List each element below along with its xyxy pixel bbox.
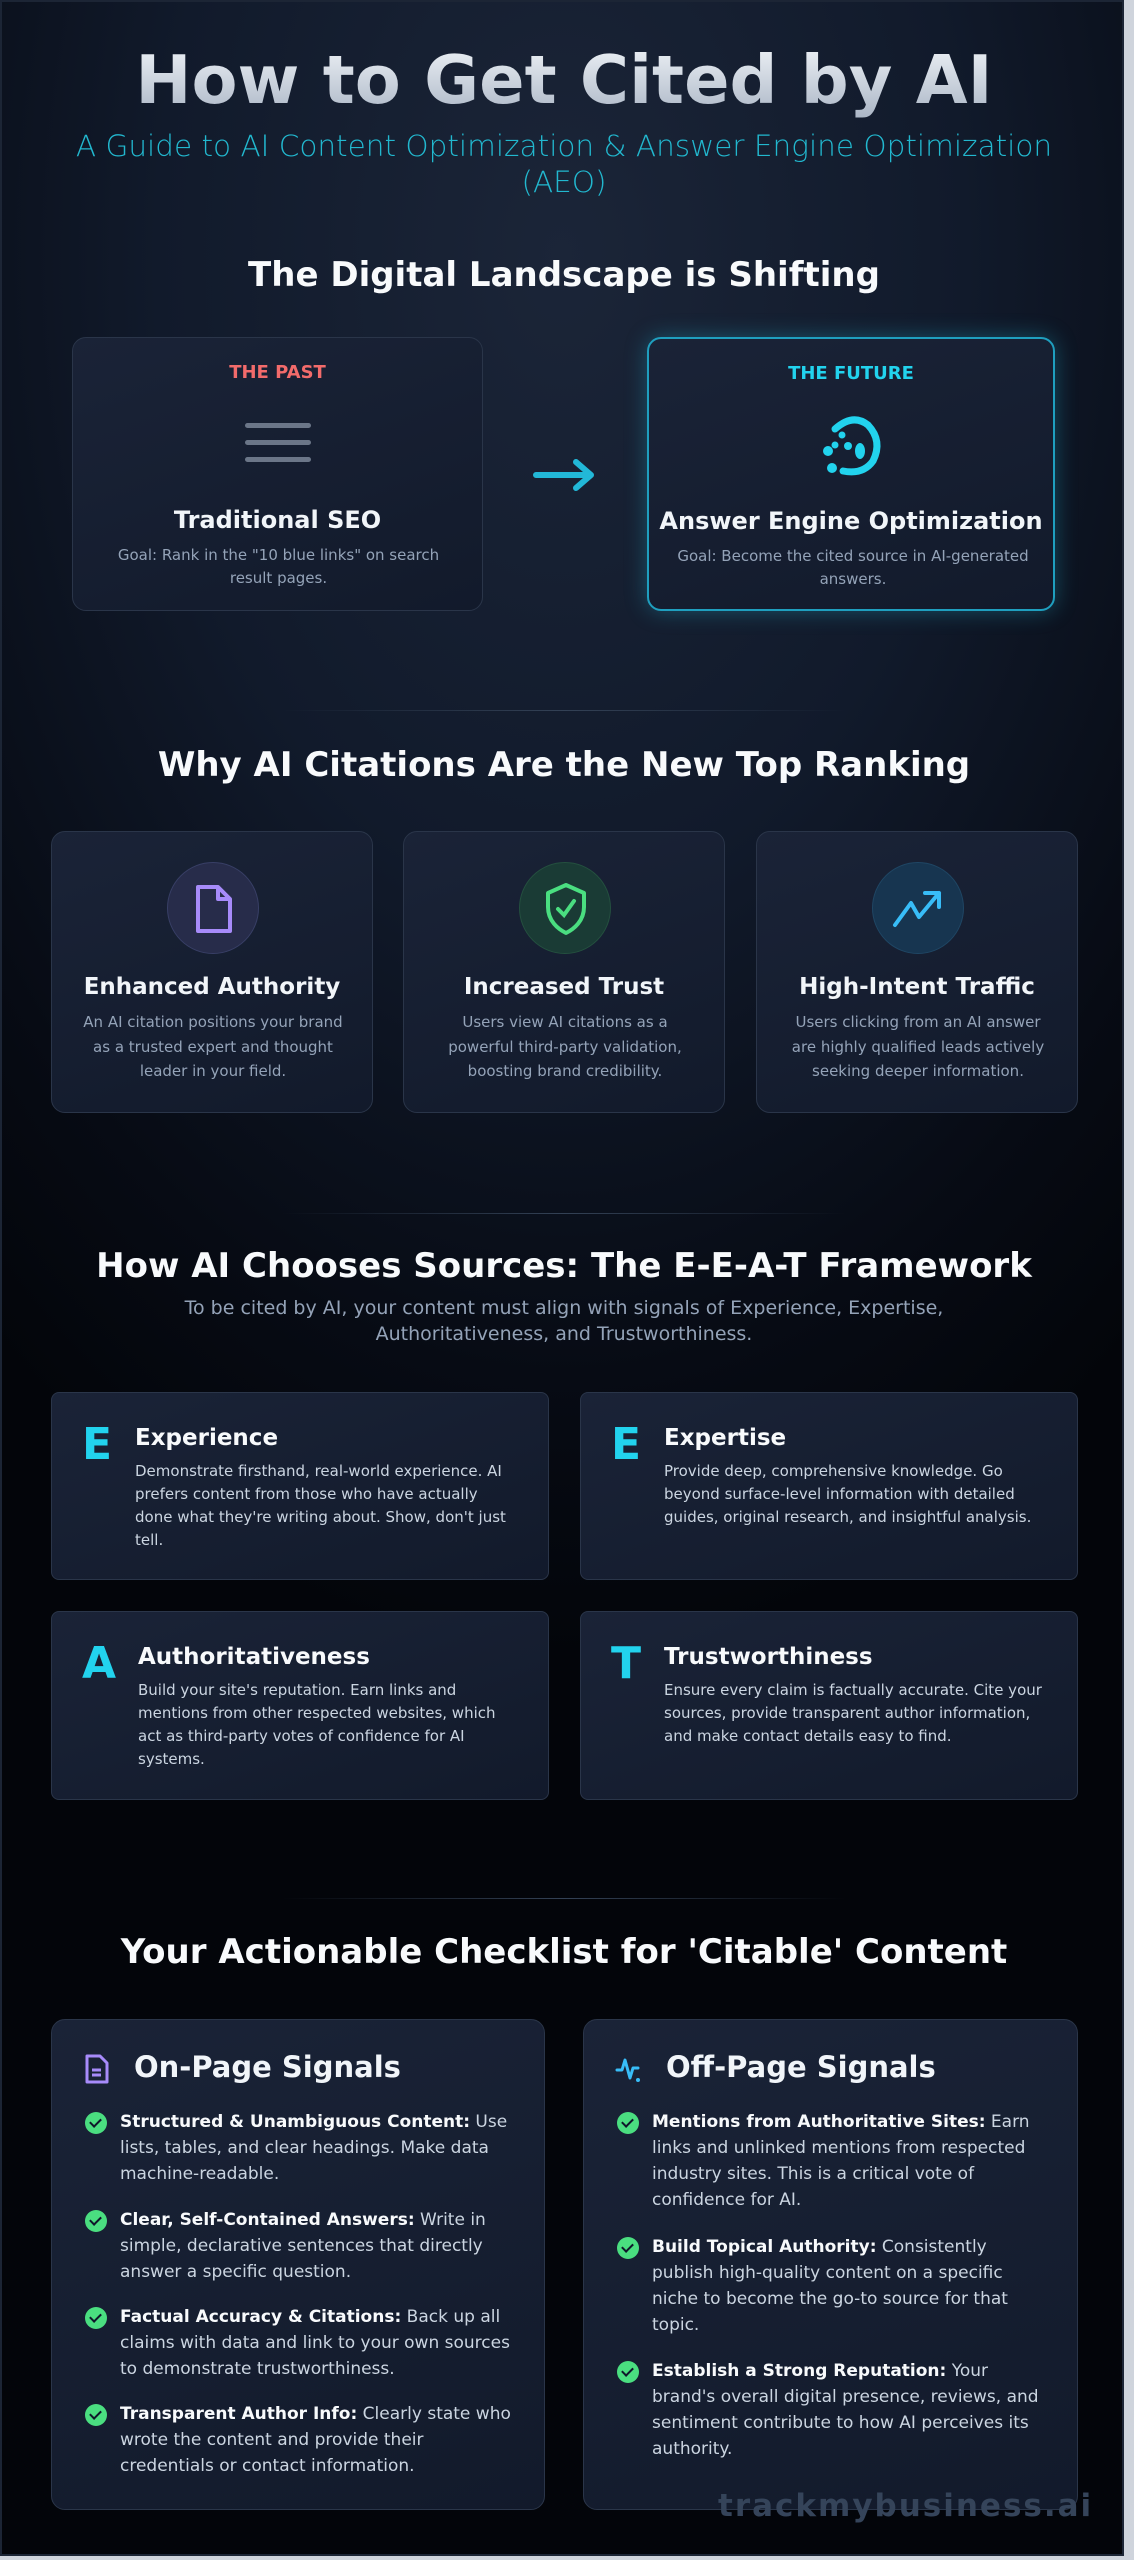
heading: why citations: Why AI Citations Are the New Top Ranking	[158, 745, 970, 785]
item: Establish a Strong Reputation: Your brand's overall digital presence, reviews, and sentiment contribute to how AI perceives its authority.	[652, 2361, 1039, 2459]
text: An AI citation positions your brand as a trusted expert and thought leader in your field.	[83, 1013, 343, 1080]
panel: the future	[647, 337, 1055, 611]
icon: shield	[519, 862, 611, 954]
item: Clear, Self-Contained Answers: Write in simple, declarative sentences that directly answer a specific question.	[120, 2210, 486, 2282]
icon: trend up	[872, 862, 964, 954]
icon: document lines	[86, 2054, 108, 2084]
text: Provide deep, comprehensive knowledge. Go beyond surface-level information with detailed guides, original research, and insightful analysis.	[664, 1462, 1031, 1526]
panel: authoritativeness	[51, 1611, 549, 1800]
heading: Trustworthiness	[664, 1644, 873, 1670]
subtitle: A Guide to AI Content Optimization & Answer Engine Optimization (AEO)	[76, 129, 1052, 199]
panel: expertise	[580, 1392, 1078, 1580]
heading: Enhanced Authority	[84, 974, 340, 1000]
panel: expertise: E	[611, 1419, 641, 1470]
panel: increased trust	[403, 831, 725, 1113]
text: Users clicking from an AI answer are highly qualified leads actively seeking deeper information.	[792, 1013, 1044, 1080]
panel: experience: E	[82, 1419, 112, 1470]
heading: traditional seo: Traditional SEO	[174, 506, 381, 534]
watermark: trackmybusiness.ai	[718, 2488, 1093, 2524]
item: Transparent Author Info: Clearly state who wrote the content and provide their credentials or contact information.	[120, 2404, 511, 2476]
arrow	[533, 459, 594, 491]
text: past goal: Goal: Rank in the "10 blue links" on search result pages.	[118, 546, 439, 587]
icon: list lines	[245, 423, 311, 462]
heading: Authoritativeness	[138, 1644, 370, 1670]
text: eeat intro: To be cited by AI, your content must align with signals of Experience, Expertise, Authoritativeness, and Trustworthiness.	[185, 1297, 943, 1345]
panel: authoritativeness: A	[82, 1638, 116, 1689]
text: Demonstrate firsthand, real-world experience. AI prefers content from those who have actually done what they're writing about. Show, don't just tell.	[135, 1462, 506, 1549]
panel: trustworthiness	[580, 1611, 1078, 1800]
text: Users view AI citations as a powerful third-party validation, boosting brand credibility.	[448, 1013, 682, 1080]
heading: Off-Page Signals	[666, 2050, 936, 2084]
panel: experience	[51, 1392, 549, 1580]
panel: the past	[72, 337, 483, 611]
heading: Experience	[135, 1425, 278, 1451]
text: Ensure every claim is factually accurate. Cite your sources, provide transparent author information, and make contact details easy to find.	[664, 1681, 1042, 1745]
heading: aeo: Answer Engine Optimization	[659, 507, 1043, 535]
panel: trustworthiness: T	[611, 1638, 641, 1689]
text: Build your site's reputation. Earn links and mentions from other respected websites, which act as third-party votes of confidence for AI systems.	[138, 1681, 496, 1768]
title: How to Get Cited by AI	[135, 41, 993, 119]
heading: Expertise	[664, 1425, 786, 1451]
panel: enhanced authority	[51, 831, 373, 1113]
item: Factual Accuracy & Citations: Back up all claims with data and link to your own sources to demonstrate trustworthiness.	[120, 2307, 510, 2379]
item: Structured & Unambiguous Content: Use lists, tables, and clear headings. Make data machine-readable.	[120, 2112, 507, 2184]
icon: ai spinner	[823, 416, 881, 476]
heading: On-Page Signals	[134, 2050, 401, 2084]
heading: Increased Trust	[464, 974, 664, 1000]
icon: document	[167, 862, 259, 954]
label: the past: THE PAST	[229, 362, 326, 383]
heading: High-Intent Traffic	[799, 974, 1035, 1000]
text: future goal: Goal: Become the cited source in AI-generated answers.	[677, 547, 1029, 588]
panel: on-page signals	[51, 2019, 545, 2510]
icon: network	[616, 2058, 640, 2082]
heading: digital landscape: The Digital Landscape is Shifting	[248, 255, 880, 295]
item: Mentions from Authoritative Sites: Earn links and unlinked mentions from respected industry sites. This is a critical vote of confidence for AI.	[652, 2112, 1030, 2210]
panel: high-intent traffic	[756, 831, 1078, 1113]
item: Build Topical Authority: Consistently publish high-quality content on a specific niche to become the go-to source for that topic.	[652, 2237, 1008, 2335]
heading: eeat: How AI Chooses Sources: The E-E-A-T Framework	[96, 1246, 1032, 1286]
panel: off-page signals	[583, 2019, 1078, 2510]
label: the future: THE FUTURE	[788, 363, 914, 384]
heading: checklist: Your Actionable Checklist for 'Citable' Content	[121, 1932, 1007, 1972]
